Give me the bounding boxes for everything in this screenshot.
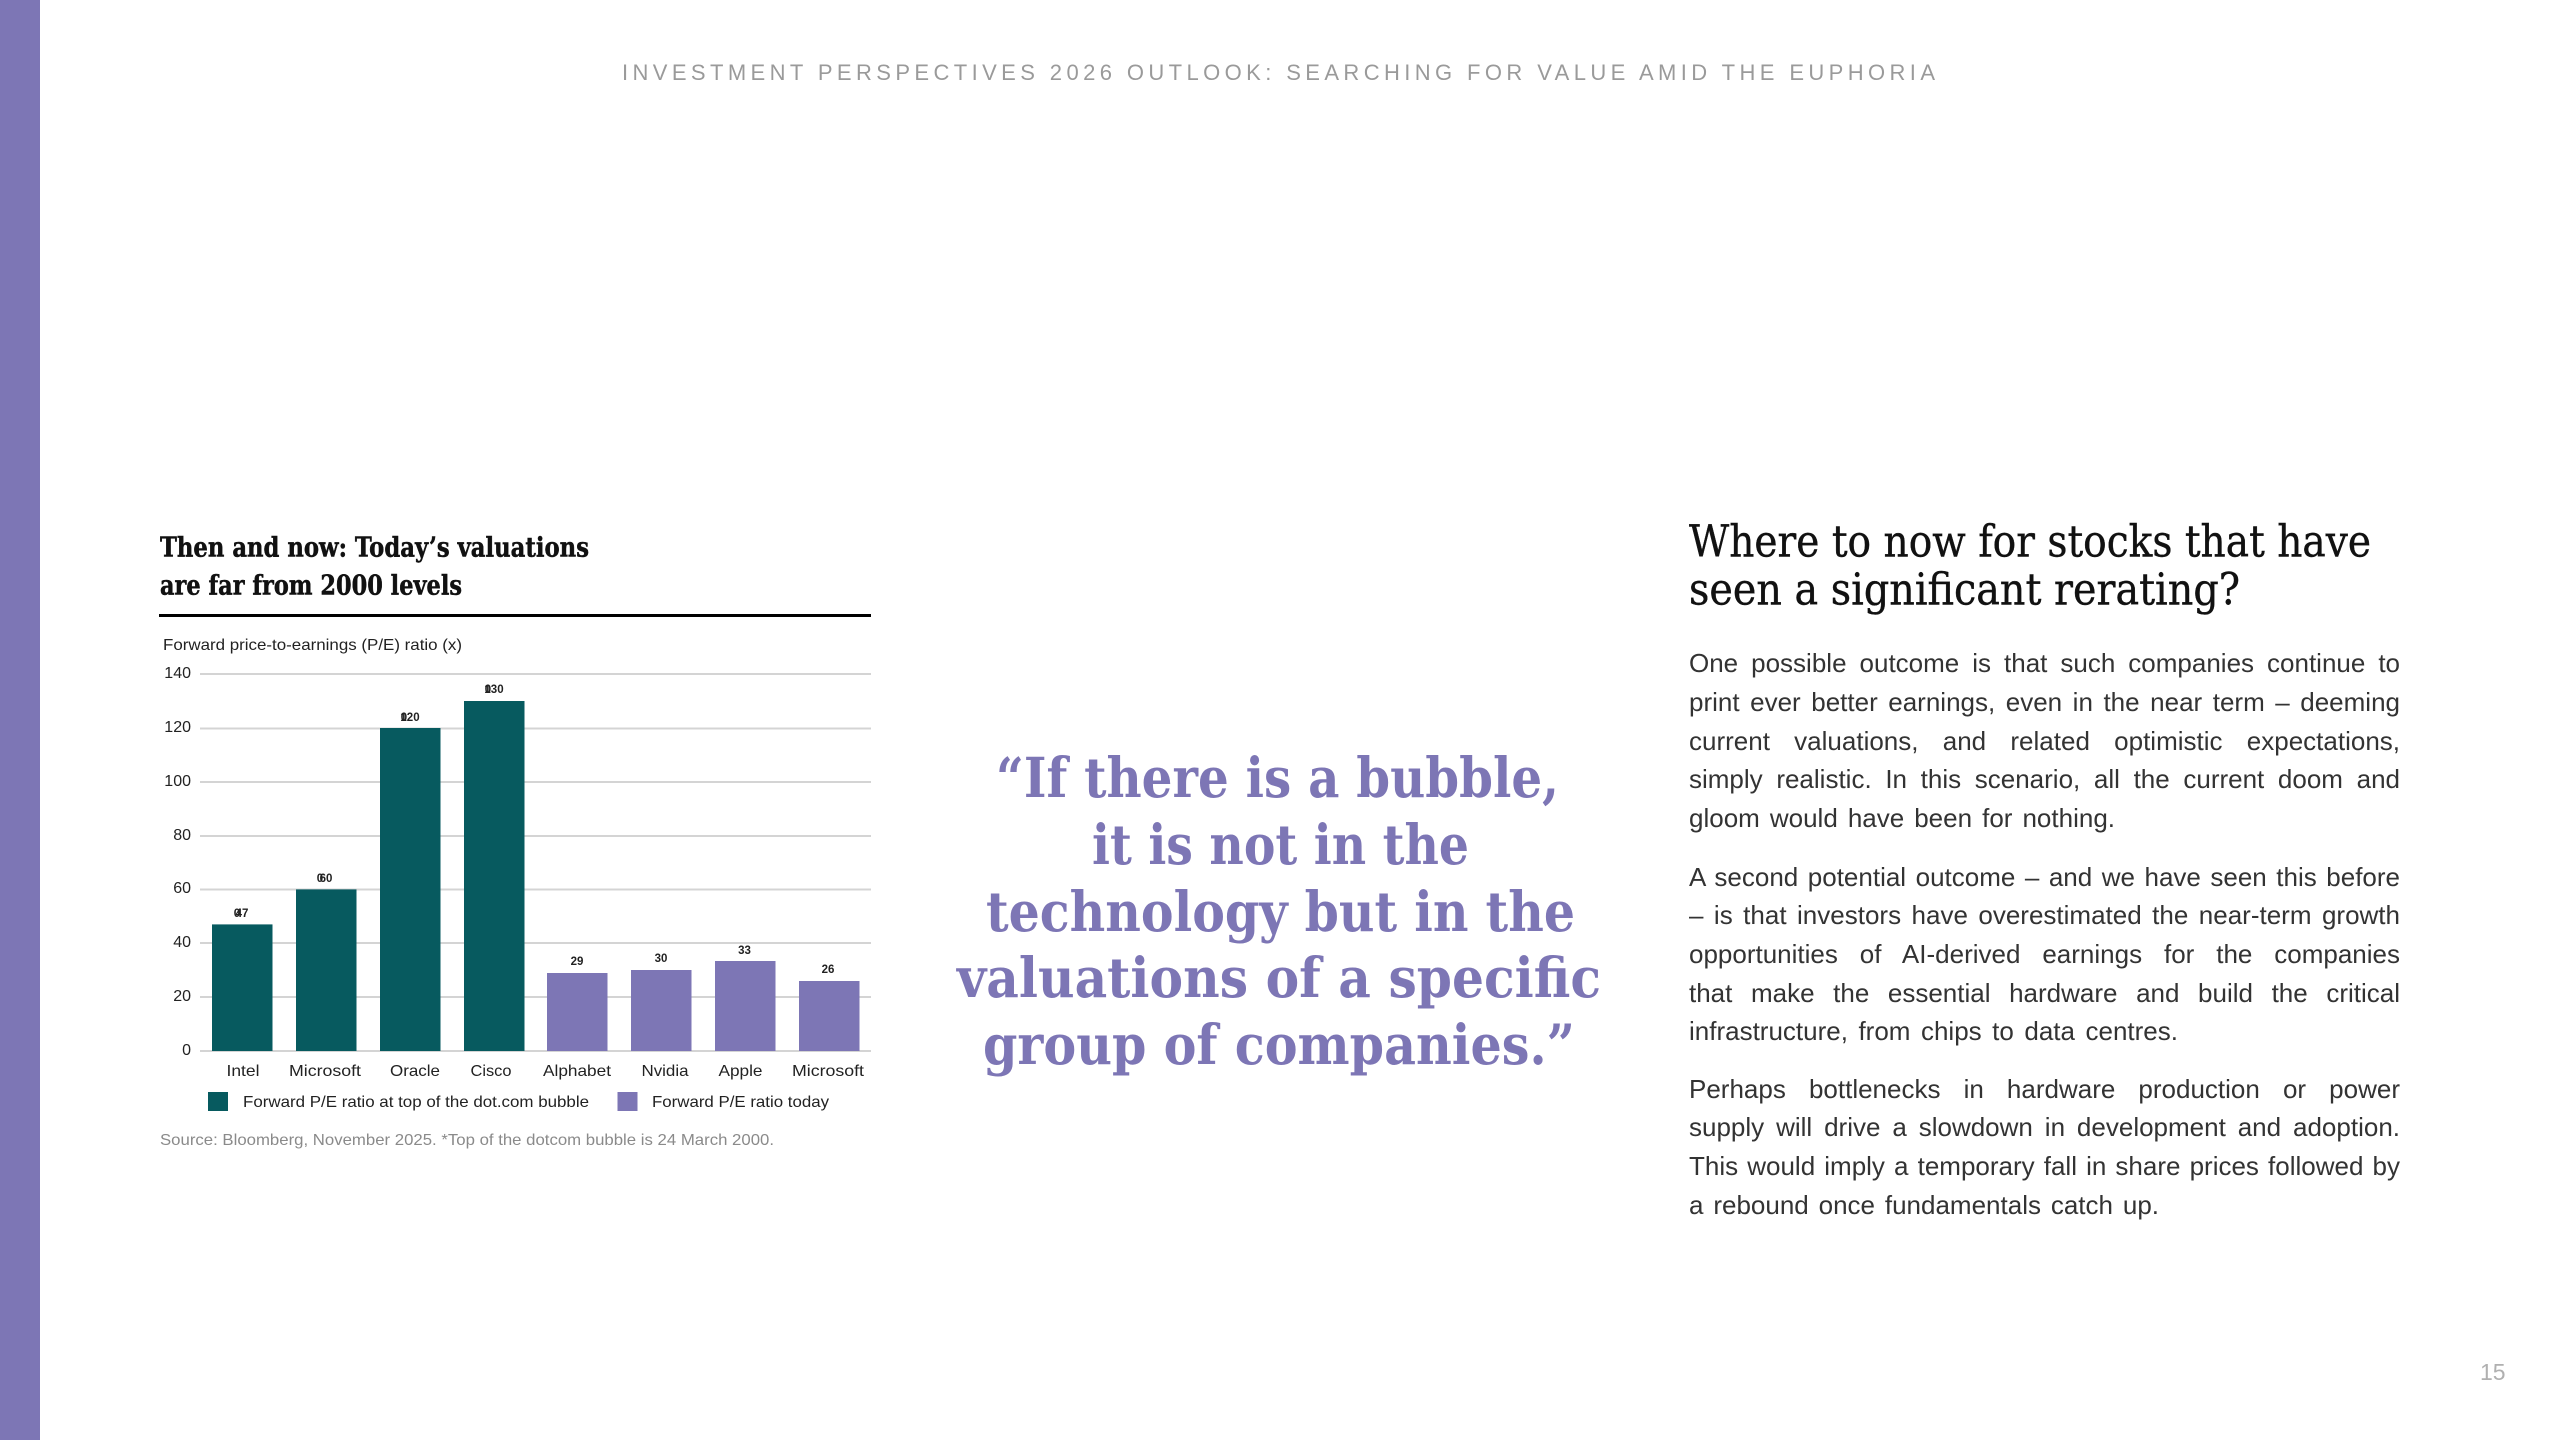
x axis labels: Alphabet: [543, 1063, 612, 1080]
legend: Forward P/E ratio at top of the dot.com bubble: [243, 1094, 589, 1111]
y axis labels: 60: [173, 880, 191, 897]
legend: Forward P/E ratio today: [652, 1094, 829, 1111]
bars: today: [547, 961, 860, 1051]
page header title: INVESTMENT PERSPECTIVES 2026 OUTLOOK: SEARCHING FOR VALUE AMID THE EUPHORIA: [622, 60, 1935, 85]
chart heading: [160, 532, 589, 602]
body text: paragraph 2: that make the essential hardware and build the critical: [1689, 978, 2400, 1008]
body text: paragraph 1: One possible outcome is that such companies continue to: [1689, 648, 2400, 678]
x axis labels: [226, 1063, 865, 1080]
y axis labels: [164, 665, 191, 1059]
data labels: 33: [738, 945, 751, 957]
x axis labels: Cisco: [470, 1063, 512, 1080]
y axis labels: 0: [182, 1042, 191, 1059]
bars: dot.com bubble peak: [212, 701, 524, 1051]
body text: paragraph 1: print ever better earnings, even in the near term – deeming: [1689, 687, 2400, 717]
data labels: 130: [484, 684, 504, 696]
chart panel: then and now: [159, 532, 871, 1149]
bar chart: forward P/E ratios: [164, 665, 871, 1080]
heading rule: [159, 614, 871, 617]
data labels: 26: [822, 964, 834, 976]
article heading: Where to now for stocks that have: [1689, 516, 2371, 568]
y axis labels: 20: [173, 988, 191, 1005]
pull quote: technology but in the: [986, 879, 1575, 944]
x axis labels: Apple: [718, 1063, 763, 1080]
pull quote: group of companies.”: [983, 1012, 1575, 1077]
body text: paragraph 3: a rebound once fundamentals catch up.: [1689, 1190, 2159, 1220]
body text: paragraph 1: [1689, 648, 2400, 833]
pull quote: [956, 745, 1601, 1077]
sidebar: purple accent strip: [0, 0, 40, 1440]
y axis labels: 120: [164, 719, 191, 736]
x axis labels: Microsoft: [792, 1063, 865, 1080]
pull quote: “If there is a bubble,: [996, 745, 1559, 810]
y axis labels: 80: [173, 827, 191, 844]
body text: paragraph 1: current valuations, and related optimistic expectations,: [1689, 726, 2400, 756]
axis title: Forward price-to-earnings (P/E) ratio (x): [163, 637, 462, 654]
body text: paragraph 3: [1689, 1074, 2400, 1220]
data labels: 29: [571, 956, 583, 968]
body text: paragraph 2: – is that investors have overestimated the near-term growth: [1689, 900, 2400, 930]
data labels: 0: [401, 712, 407, 724]
source note: Source: Bloomberg, November 2025. *Top of the dotcom bubble is 24 March 2000.: [160, 1132, 774, 1149]
body text: paragraph 2: infrastructure, from chips to data centres.: [1689, 1016, 2178, 1046]
article heading: seen a significant rerating?: [1689, 564, 2240, 616]
article heading: [1689, 516, 2371, 616]
body text: paragraph 1: simply realistic. In this scenario, all the current doom and: [1689, 764, 2400, 794]
body text: paragraph 2: [1689, 862, 2400, 1046]
body text: paragraph 2: A second potential outcome – and we have seen this before: [1689, 862, 2400, 892]
pull quote: it is not in the: [1092, 812, 1469, 877]
data labels: 0: [317, 873, 323, 885]
data labels: [234, 684, 834, 976]
body text: paragraph 3: This would imply a temporary fall in share prices followed by: [1689, 1151, 2400, 1181]
x axis labels: Intel: [226, 1063, 260, 1080]
pull quote: valuations of a specific: [956, 945, 1601, 1010]
x axis labels: Oracle: [390, 1063, 440, 1080]
data labels: 0: [234, 908, 240, 920]
data labels: 120: [400, 712, 420, 724]
chart heading: Then and now: Today’s valuations: [160, 532, 589, 564]
page number: 15: [2480, 1359, 2506, 1385]
y axis labels: 140: [164, 665, 191, 682]
y axis labels: 100: [164, 773, 191, 790]
chart heading: are far from 2000 levels: [160, 570, 462, 602]
data labels: 0: [485, 684, 491, 696]
x axis labels: Nvidia: [642, 1063, 689, 1080]
x axis labels: Microsoft: [289, 1063, 362, 1080]
body text: paragraph 3: supply will drive a slowdown in development and adoption.: [1689, 1112, 2400, 1142]
data labels: 30: [655, 953, 667, 965]
body text: paragraph 1: gloom would have been for nothing.: [1689, 803, 2115, 833]
gridlines: [200, 673, 871, 1052]
data labels: 60: [320, 873, 332, 885]
body text: paragraph 3: Perhaps bottlenecks in hardware production or power: [1689, 1074, 2400, 1104]
y axis labels: 40: [173, 934, 191, 951]
data labels: 47: [236, 908, 248, 920]
legend: [208, 1092, 829, 1111]
body text: paragraph 2: opportunities of AI-derived earnings for the companies: [1689, 939, 2400, 969]
